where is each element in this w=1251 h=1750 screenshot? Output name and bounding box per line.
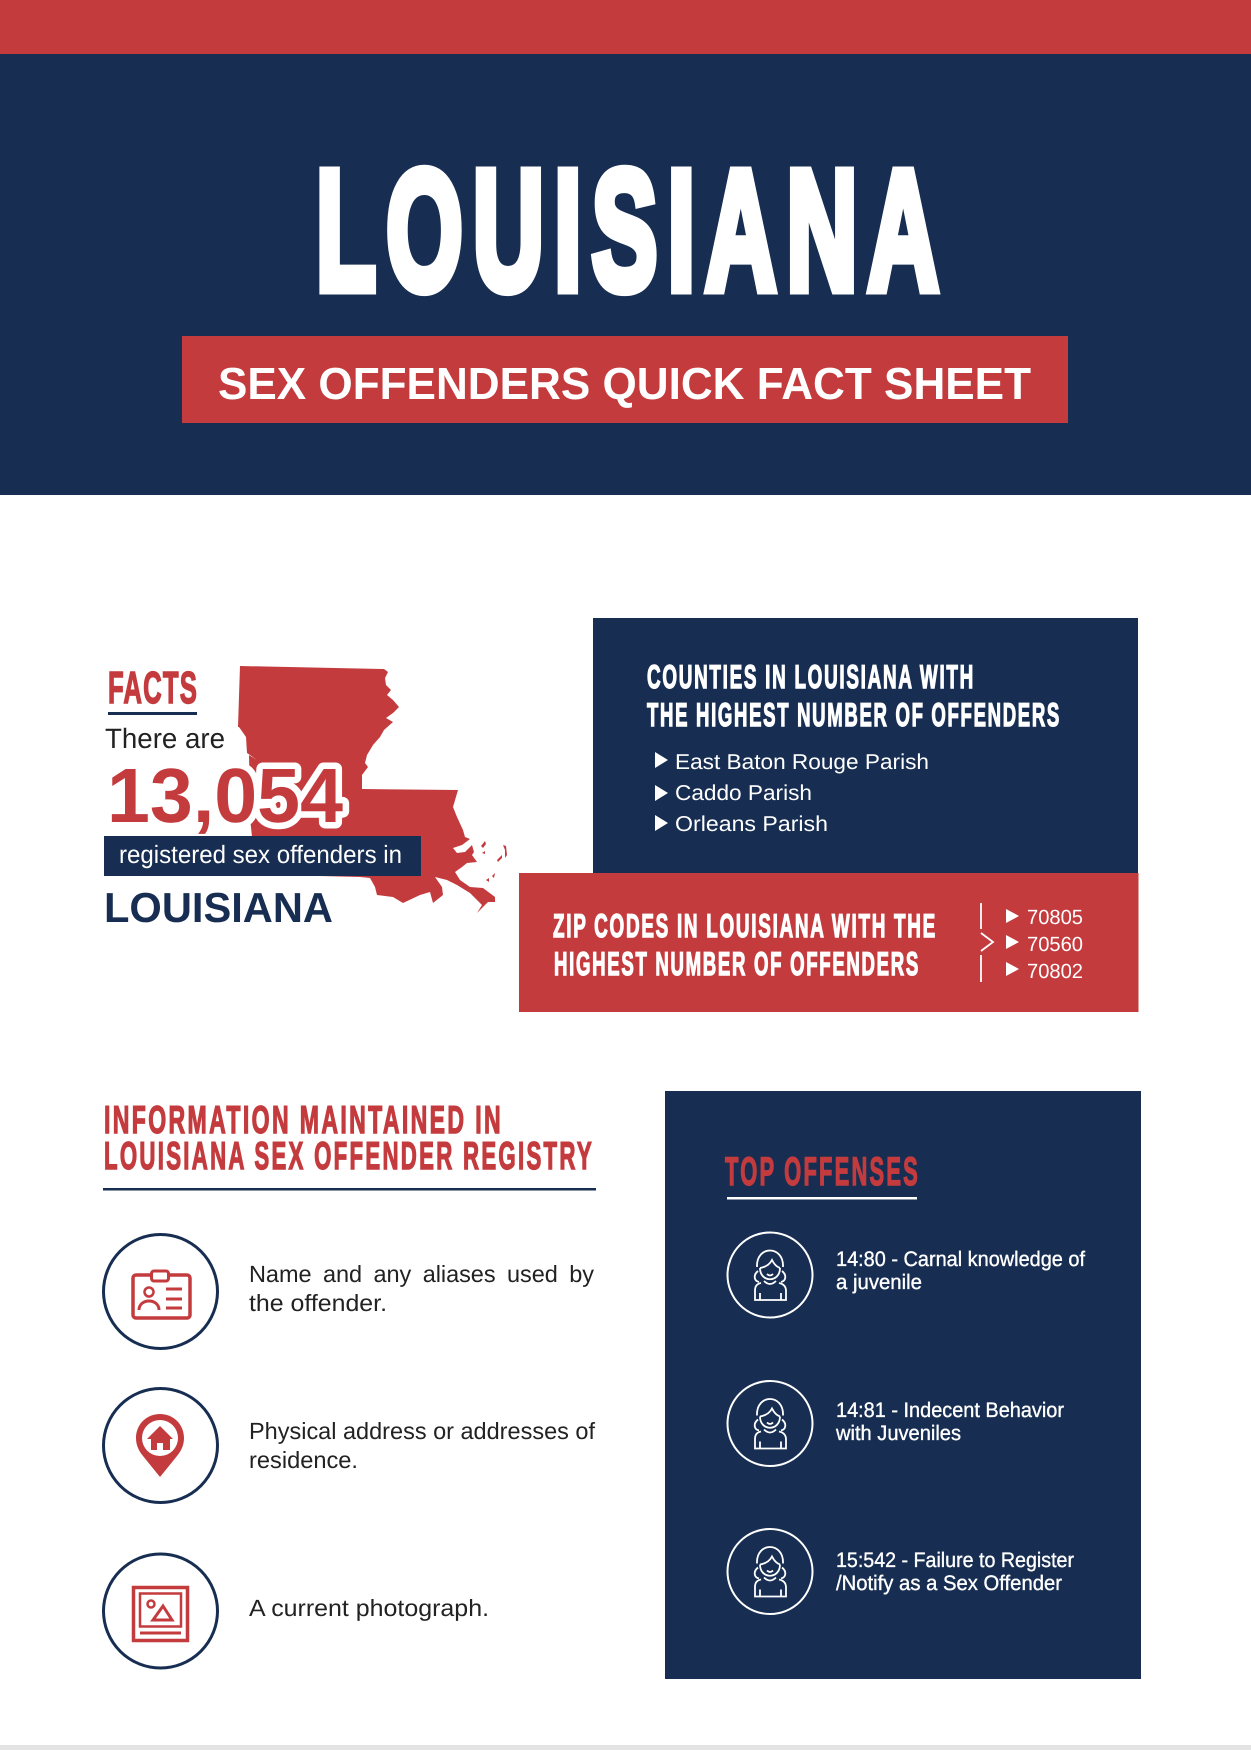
panel: facts (104, 662, 507, 931)
zip list (1006, 906, 1083, 983)
map of Louisiana (238, 666, 507, 913)
big number: 13,054 (107, 753, 343, 839)
panel: zip codes (519, 873, 1138, 1012)
text: name: Name and any aliases used by (249, 1261, 594, 1287)
counties list: East Baton Rouge Parish (675, 750, 929, 774)
zip heading (553, 907, 937, 982)
registry heading (104, 1099, 594, 1178)
registry heading: LOUISIANA SEX OFFENDER REGISTRY (104, 1135, 594, 1178)
counties list: Caddo Parish (675, 781, 812, 805)
icon: child (728, 1529, 812, 1614)
offense 2 (728, 1381, 1064, 1466)
counties heading (647, 658, 1061, 733)
counties heading: COUNTIES IN LOUISIANA WITH (647, 658, 975, 695)
text: address: Physical address or addresses of (249, 1418, 595, 1444)
text: address: residence. (249, 1447, 358, 1473)
navy label (104, 836, 421, 876)
text: photograph: A current photograph. (249, 1595, 489, 1621)
zip heading: ZIP CODES IN LOUISIANA WITH THE (553, 907, 937, 944)
zip list: 70802 (1027, 960, 1083, 983)
item: name (104, 1234, 594, 1348)
subtitle banner: SEX OFFENDERS QUICK FACT SHEET (218, 358, 1031, 409)
text: name: the offender. (249, 1290, 387, 1316)
header panel (0, 54, 1251, 495)
text: offense 1 (836, 1248, 1085, 1294)
text: offense 1: 14:80 - Carnal knowledge of (836, 1248, 1085, 1271)
text: address (249, 1418, 595, 1473)
state name: LOUISIANA (104, 884, 333, 931)
text: name (249, 1261, 594, 1316)
item: address (104, 1388, 595, 1502)
text: offense 1: a juvenile (836, 1271, 922, 1294)
top offenses heading: TOP OFFENSES (725, 1150, 920, 1194)
intro text: There are (105, 723, 225, 754)
zip list: 70805 (1027, 906, 1083, 929)
heading: facts: FACTS (108, 662, 198, 713)
text: offense 3 (836, 1549, 1074, 1595)
offense 1 (728, 1232, 1085, 1318)
text: offense 3: 15:542 - Failure to Register (836, 1549, 1074, 1572)
zip heading: HIGHEST NUMBER OF OFFENDERS (554, 945, 920, 982)
navy label: registered sex offenders in (119, 841, 402, 869)
icon: photo (104, 1554, 218, 1668)
subtitle banner (182, 336, 1068, 423)
text: offense 2: with Juveniles (835, 1422, 961, 1445)
top red band (0, 0, 1251, 54)
registry heading: INFORMATION MAINTAINED IN (104, 1099, 503, 1142)
item: photograph (104, 1554, 489, 1668)
panel: registry information (103, 1099, 596, 1668)
offense 3 (728, 1529, 1074, 1614)
counties list (655, 750, 929, 836)
counties list: Orleans Parish (675, 812, 828, 836)
panel: counties (593, 618, 1138, 873)
icon: home pin (104, 1388, 218, 1502)
zip list: 70560 (1027, 933, 1083, 956)
text: offense 3: /Notify as a Sex Offender (836, 1572, 1062, 1595)
bracket divider (981, 903, 993, 982)
panel: top offenses (665, 1091, 1141, 1679)
icon: child (728, 1232, 812, 1318)
text: offense 2 (835, 1399, 1064, 1445)
icon: id card (104, 1234, 218, 1348)
icon: child (728, 1381, 812, 1466)
text: offense 2: 14:81 - Indecent Behavior (836, 1399, 1064, 1422)
